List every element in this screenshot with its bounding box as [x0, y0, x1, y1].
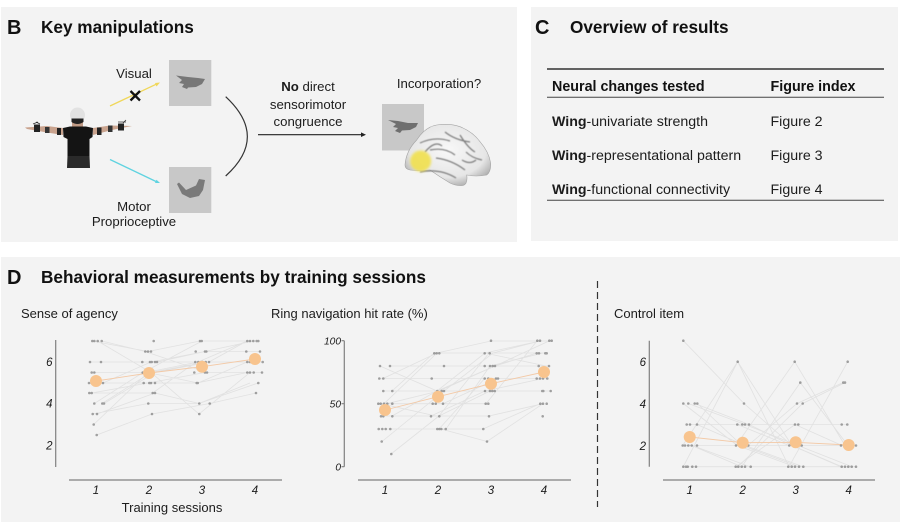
label: motor proprioceptive: Motor	[117, 199, 151, 214]
divider: dashed vertical line	[596, 281, 598, 507]
bracket curve	[226, 97, 247, 176]
arrow: visual (yellow)	[110, 82, 160, 106]
label: motor proprioceptive: Proprioceptive	[92, 214, 176, 229]
panel: behavioral measurements	[1, 257, 900, 522]
chart: control item: 3	[792, 485, 799, 497]
table: neural changes and figure index: Figure index	[770, 79, 856, 95]
table: neural changes and figure index: Wing-functional connectivity	[552, 182, 731, 198]
heading: overview of results: Overview of results	[570, 17, 729, 37]
image: wing at incorporation	[382, 104, 424, 150]
chart: sense of agency	[45, 340, 282, 497]
arrow: motor proprioceptive (cyan)	[110, 160, 160, 183]
table: neural changes and figure index: Wing-representational pattern	[552, 148, 741, 164]
panel letter D: D	[7, 267, 21, 289]
chart: sense of agency: 4	[252, 485, 258, 497]
chart: ring navigation hit rate	[324, 336, 571, 497]
chart: control item: 4	[845, 485, 852, 497]
heading: behavioral measurements by training sessions: Behavioral measurements by training sessions	[41, 267, 426, 287]
chart: control item: 6	[640, 357, 647, 369]
chart: ring navigation hit rate: 50	[330, 400, 341, 410]
table: neural changes and figure index: Neural changes tested	[552, 79, 705, 95]
chart: sense of agency: 2	[45, 440, 53, 452]
label: no direct sensorimotor congruence: No direct	[281, 79, 335, 94]
subtitle: sense of agency: Sense of agency	[21, 306, 118, 321]
subtitle: ring navigation hit rate: Ring navigation hit rate (%)	[271, 306, 428, 321]
chart: control item: 2	[639, 441, 647, 453]
table: neural changes and figure index: Wing-univariate strength	[552, 114, 708, 130]
chart: ring navigation hit rate: 4	[541, 485, 547, 497]
arrow: toward incorporation	[258, 132, 366, 137]
heading: key manipulations: Key manipulations	[41, 17, 194, 37]
panel letter B: B	[7, 17, 21, 39]
panel: overview of results	[531, 7, 898, 241]
label: incorporation question: Incorporation?	[397, 76, 481, 91]
chart: control item: 2	[738, 485, 746, 497]
label: no direct sensorimotor congruence: sensorimotor	[270, 97, 347, 112]
panel: key manipulations	[1, 7, 517, 242]
table: neural changes and figure index: Figure 4	[770, 182, 823, 198]
chart: ring navigation hit rate: 1	[382, 485, 388, 497]
chart: control item: 4	[640, 399, 646, 411]
chart: control item	[639, 341, 875, 497]
panel letter C: C	[535, 17, 549, 39]
icon: participant with VR headset and outstretched arms	[25, 108, 132, 168]
table: neural changes and figure index: Figure 3	[770, 148, 823, 164]
label: no direct sensorimotor congruence: congruence	[274, 114, 342, 129]
chart: sense of agency: 2	[145, 485, 153, 497]
image: motor wing	[169, 167, 211, 213]
table: neural changes and figure index	[547, 69, 884, 200]
chart: sense of agency: 3	[199, 485, 206, 497]
axis label: training sessions: Training sessions	[122, 500, 223, 515]
chart: ring navigation hit rate: 100	[324, 336, 341, 348]
chart: ring navigation hit rate: 3	[488, 485, 495, 497]
chart: sense of agency: 4	[46, 398, 52, 410]
chart: sense of agency: 6	[46, 357, 53, 369]
chart: ring navigation hit rate: 2	[434, 485, 442, 497]
image: visual wing	[169, 60, 211, 106]
subtitle: control item: Control item	[614, 306, 684, 321]
chart: control item: 1	[686, 485, 693, 497]
chart: ring navigation hit rate: 0	[335, 462, 341, 474]
table: neural changes and figure index: Figure 2	[770, 114, 823, 130]
label: visual: Visual	[116, 66, 152, 81]
icon: brain with yellow region	[405, 124, 491, 186]
icon: cross mark on visual arrow	[130, 91, 140, 100]
chart: sense of agency: 1	[93, 485, 99, 497]
